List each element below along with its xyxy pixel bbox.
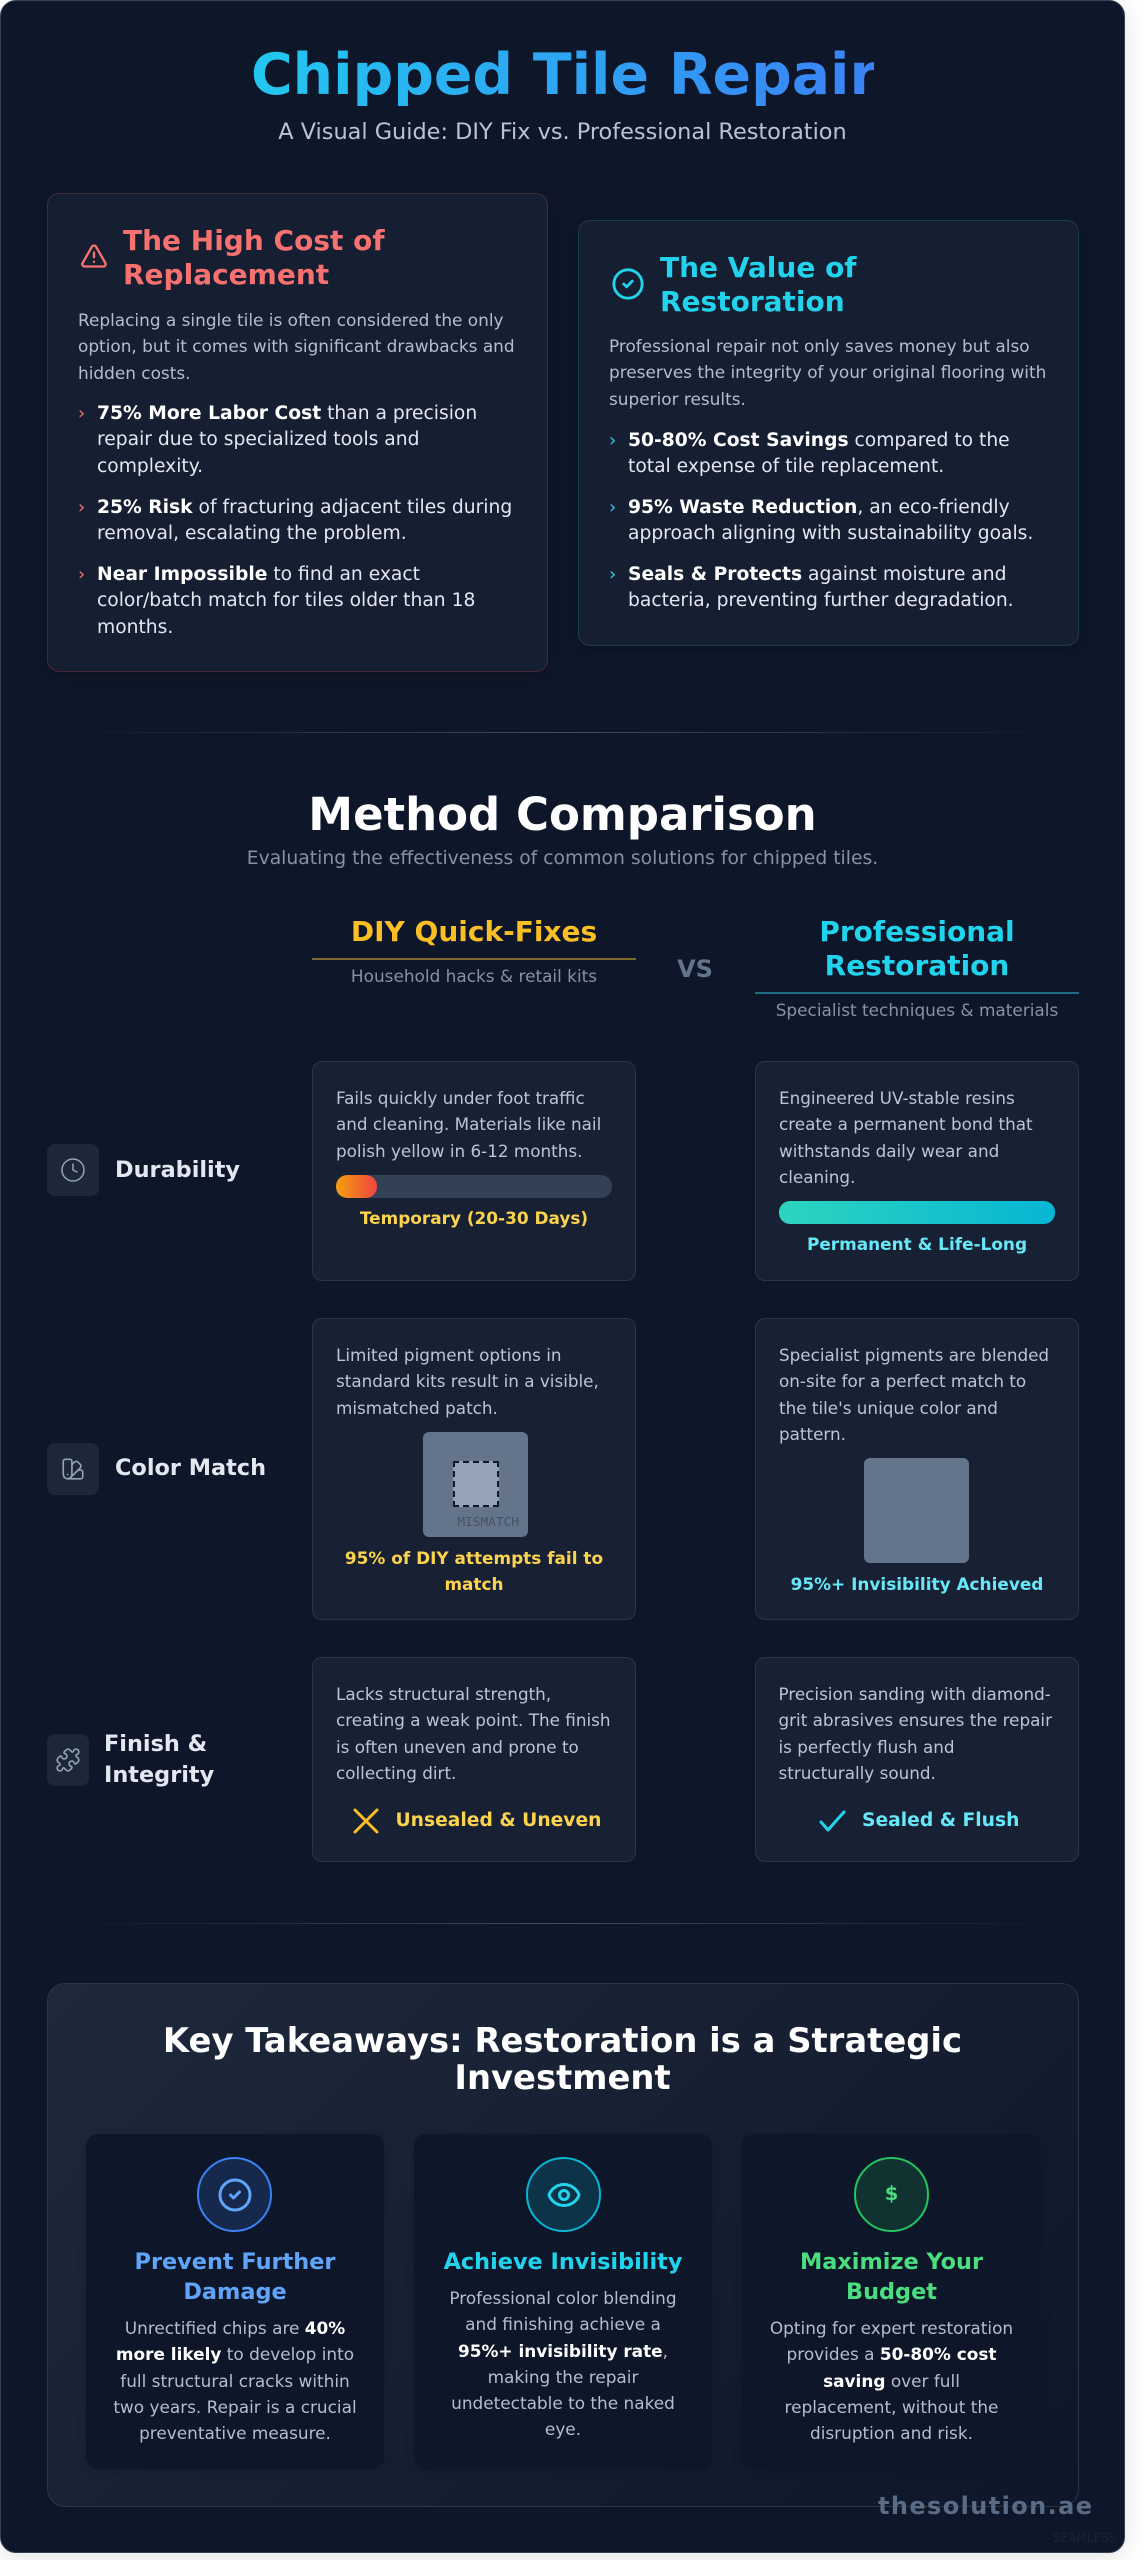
- mismatch label: MISMATCH: [457, 1515, 519, 1530]
- intro text: [609, 336, 1046, 409]
- status: unsealed: [353, 1808, 601, 1834]
- text: [449, 2288, 677, 2439]
- bullet 2: 95% Waste Reduction, an eco-friendly: [628, 497, 1010, 518]
- text: standard kits result in a visible,: [336, 1371, 599, 1391]
- intro text: Replacing a single tile is often considered the only: [78, 310, 504, 330]
- heading: [800, 2249, 983, 2305]
- subheading: Evaluating the effectiveness of common solutions for chipped tiles.: [247, 848, 878, 869]
- key takeaways heading: Key Takeaways: Restoration is a Strategic: [163, 2021, 962, 2060]
- label: Unsealed & Uneven: [396, 1810, 601, 1831]
- icon: clock: [47, 1144, 99, 1196]
- mismatched patch: [453, 1461, 499, 1507]
- bullet 1: repair due to specialized tools and: [97, 429, 419, 450]
- DIY caption: Household hacks & retail kits: [351, 966, 597, 986]
- heading: [135, 2249, 336, 2305]
- professional caption: Specialist techniques & materials: [776, 1000, 1058, 1020]
- text: Unrectified chips are 40%: [125, 2318, 345, 2338]
- text: [770, 2318, 1013, 2443]
- icon: cross: [353, 1808, 379, 1834]
- label: [104, 1731, 214, 1788]
- heading: Maximize Your: [800, 2249, 983, 2275]
- text: Professional color blending: [449, 2288, 677, 2308]
- text: replacement, without the: [785, 2397, 998, 2417]
- text: Opting for expert restoration: [770, 2318, 1013, 2338]
- label: Sealed & Flush: [862, 1810, 1019, 1831]
- text: collecting dirt.: [336, 1763, 456, 1783]
- label: Integrity: [104, 1762, 214, 1788]
- bullet list: ›: [78, 497, 85, 518]
- text: mismatched patch.: [336, 1398, 498, 1418]
- intro text: Professional repair not only saves money but also: [609, 336, 1030, 356]
- bullet list: ›: [78, 403, 85, 424]
- status: sealed: [819, 1810, 1019, 1832]
- heading: Achieve Invisibility: [444, 2249, 682, 2275]
- tile swatch with patch: [423, 1432, 528, 1537]
- row label: color match: [47, 1443, 266, 1495]
- card: maximize your budget: [742, 2134, 1041, 2469]
- text: structurally sound.: [778, 1763, 936, 1783]
- subtitle: A Visual Guide: DIY Fix vs. Professional Restoration: [278, 119, 847, 145]
- card: professional durability: [755, 1061, 1079, 1281]
- heading: The High Cost of: [123, 224, 385, 257]
- caption: Permanent & Life-Long: [807, 1234, 1027, 1254]
- bullet list: ›: [609, 497, 616, 518]
- text: creating a weak point. The finish: [336, 1710, 610, 1730]
- professional title: Restoration: [825, 949, 1009, 982]
- icon: check circle: [612, 268, 644, 300]
- bullet list: [609, 430, 1033, 611]
- icon: dollar circle: [854, 2157, 929, 2232]
- card: professional finish: [755, 1657, 1079, 1862]
- heading: The Value of: [660, 251, 856, 284]
- text: eye.: [545, 2419, 581, 2439]
- text: Limited pigment options in: [336, 1345, 562, 1365]
- intro text: preserves the integrity of your original flooring with: [609, 362, 1046, 382]
- text: the tile's unique color and: [779, 1398, 998, 1418]
- text: provides a 50-80% cost: [787, 2344, 996, 2364]
- text: two years. Repair is a crucial: [113, 2397, 357, 2417]
- title: Chipped Tile Repair: [251, 42, 878, 108]
- tile swatch seamless: [864, 1458, 969, 1563]
- bullet 3: Near Impossible to find an exact: [97, 564, 420, 585]
- text: and finishing achieve a: [465, 2314, 661, 2334]
- intro text: superior results.: [609, 389, 746, 409]
- text: is perfectly flush and: [778, 1737, 955, 1757]
- text: full structural cracks within: [120, 2371, 350, 2391]
- text: create a permanent bond that: [779, 1114, 1033, 1134]
- key takeaways heading: [163, 2021, 962, 2097]
- text: pattern.: [779, 1424, 846, 1444]
- column header: professional: [755, 915, 1079, 1020]
- bullet list: [78, 403, 512, 638]
- row label: durability: [47, 1144, 240, 1196]
- icon: dollar circle: $: [885, 2182, 898, 2205]
- text: Lacks structural strength,: [336, 1684, 551, 1704]
- heading: Budget: [846, 2279, 937, 2305]
- bullet list: ›: [609, 564, 616, 585]
- text: [336, 1088, 601, 1161]
- DIY underline: [312, 958, 636, 960]
- bullet list: ›: [78, 564, 85, 585]
- bar fill: [336, 1175, 377, 1198]
- panel: the value of restoration: [578, 220, 1079, 646]
- text: on-site for a perfect match to: [779, 1371, 1026, 1391]
- row label: finish and integrity: [47, 1731, 214, 1788]
- icon: puzzle: [47, 1734, 89, 1786]
- caption: 95% of DIY attempts fail to: [345, 1548, 603, 1568]
- durability bar: [779, 1201, 1055, 1224]
- bullet 2: [609, 497, 1033, 544]
- label: Color Match: [115, 1455, 266, 1481]
- bullet 1: complexity.: [97, 456, 203, 477]
- icon: eye circle: [526, 2157, 601, 2232]
- heading: [123, 224, 385, 291]
- professional title: Professional: [819, 915, 1015, 948]
- bullet 1: [609, 430, 1010, 477]
- card: DIY color match: [312, 1318, 636, 1620]
- text: Fails quickly under foot traffic: [336, 1088, 585, 1108]
- text: 95%+ invisibility rate,: [458, 2341, 668, 2361]
- caption: Temporary (20-30 Days): [360, 1208, 588, 1228]
- bullet 1: 75% More Labor Cost than a precision: [97, 403, 477, 424]
- bullet 3: months.: [97, 617, 173, 638]
- card: achieve invisibility: [414, 2134, 712, 2469]
- text: saving over full: [823, 2371, 960, 2391]
- icon: check: [819, 1810, 846, 1832]
- key takeaways heading: Investment: [454, 2058, 671, 2097]
- text: [336, 1684, 610, 1783]
- label: Durability: [115, 1157, 240, 1183]
- text: cleaning.: [779, 1167, 855, 1187]
- text: preventative measure.: [139, 2423, 331, 2443]
- card: professional color match: [755, 1318, 1079, 1620]
- text: [779, 1345, 1049, 1444]
- label: Finish &: [104, 1731, 207, 1757]
- text: [113, 2318, 357, 2443]
- card: DIY durability: [312, 1061, 636, 1281]
- text: undetectable to the naked: [451, 2393, 675, 2413]
- bullet 2: approach aligning with sustainability goals.: [628, 523, 1033, 544]
- text: grit abrasives ensures the repair: [778, 1710, 1052, 1730]
- icon: prevent circle: [197, 2157, 272, 2232]
- bullet 3: [609, 564, 1014, 611]
- text: Engineered UV-stable resins: [779, 1088, 1015, 1108]
- column header: DIY: [312, 915, 636, 986]
- professional title: [819, 915, 1015, 982]
- text: [336, 1345, 599, 1418]
- bullet 3: [78, 564, 475, 638]
- text: disruption and risk.: [810, 2423, 973, 2443]
- intro text: hidden costs.: [78, 363, 191, 383]
- bullet 1: [78, 403, 477, 477]
- icon: swatch book: [47, 1443, 99, 1495]
- bullet 3: bacteria, preventing further degradation.: [628, 590, 1014, 611]
- text: making the repair: [488, 2367, 638, 2387]
- VS label: VS: [677, 955, 713, 983]
- text: [778, 1684, 1052, 1783]
- text: Specialist pigments are blended: [779, 1345, 1049, 1365]
- bullet 2: [78, 497, 512, 544]
- bullet 1: total expense of tile replacement.: [628, 456, 944, 477]
- caption: match: [444, 1574, 504, 1594]
- bullet 2: removal, escalating the problem.: [97, 523, 407, 544]
- heading: Replacement: [123, 258, 329, 291]
- bullet 3: color/batch match for tiles older than 18: [97, 590, 475, 611]
- text: polish yellow in 6-12 months.: [336, 1141, 582, 1161]
- bullet 1: 50-80% Cost Savings compared to the: [628, 430, 1010, 451]
- heading: [660, 251, 857, 318]
- card: DIY finish: [312, 1657, 636, 1862]
- heading: Damage: [183, 2279, 287, 2305]
- caption: [345, 1548, 603, 1594]
- bullet 2: 25% Risk of fracturing adjacent tiles during: [97, 497, 512, 518]
- watermark: thesolution.ae: [878, 2492, 1093, 2520]
- panel: key takeaways: [47, 1983, 1079, 2507]
- intro text: option, but it comes with significant drawbacks and: [78, 336, 515, 356]
- text: [779, 1088, 1033, 1187]
- professional underline: [755, 992, 1079, 994]
- heading: Restoration: [660, 285, 845, 318]
- icon: warning triangle: [81, 244, 107, 268]
- text: more likely to develop into: [116, 2344, 354, 2364]
- bullet 3: Seals & Protects against moisture and: [628, 564, 1006, 585]
- bullet list: ›: [609, 430, 616, 451]
- heading: method comparison: Method Comparison: [308, 788, 817, 841]
- text: Precision sanding with diamond-: [778, 1684, 1051, 1704]
- durability bar: [336, 1175, 612, 1198]
- panel: the high cost of replacement: [47, 193, 548, 672]
- DIY title: DIY Quick-Fixes: [351, 915, 597, 948]
- heading: Prevent Further: [135, 2249, 335, 2275]
- seamless mark: SEAMLESS: [1053, 2531, 1116, 2545]
- intro text: [78, 310, 515, 383]
- text: is often uneven and prone to: [336, 1737, 579, 1757]
- card: prevent further damage: [86, 2134, 384, 2469]
- text: withstands daily wear and: [779, 1141, 999, 1161]
- caption: 95%+ Invisibility Achieved: [791, 1574, 1043, 1594]
- text: and cleaning. Materials like nail: [336, 1114, 601, 1134]
